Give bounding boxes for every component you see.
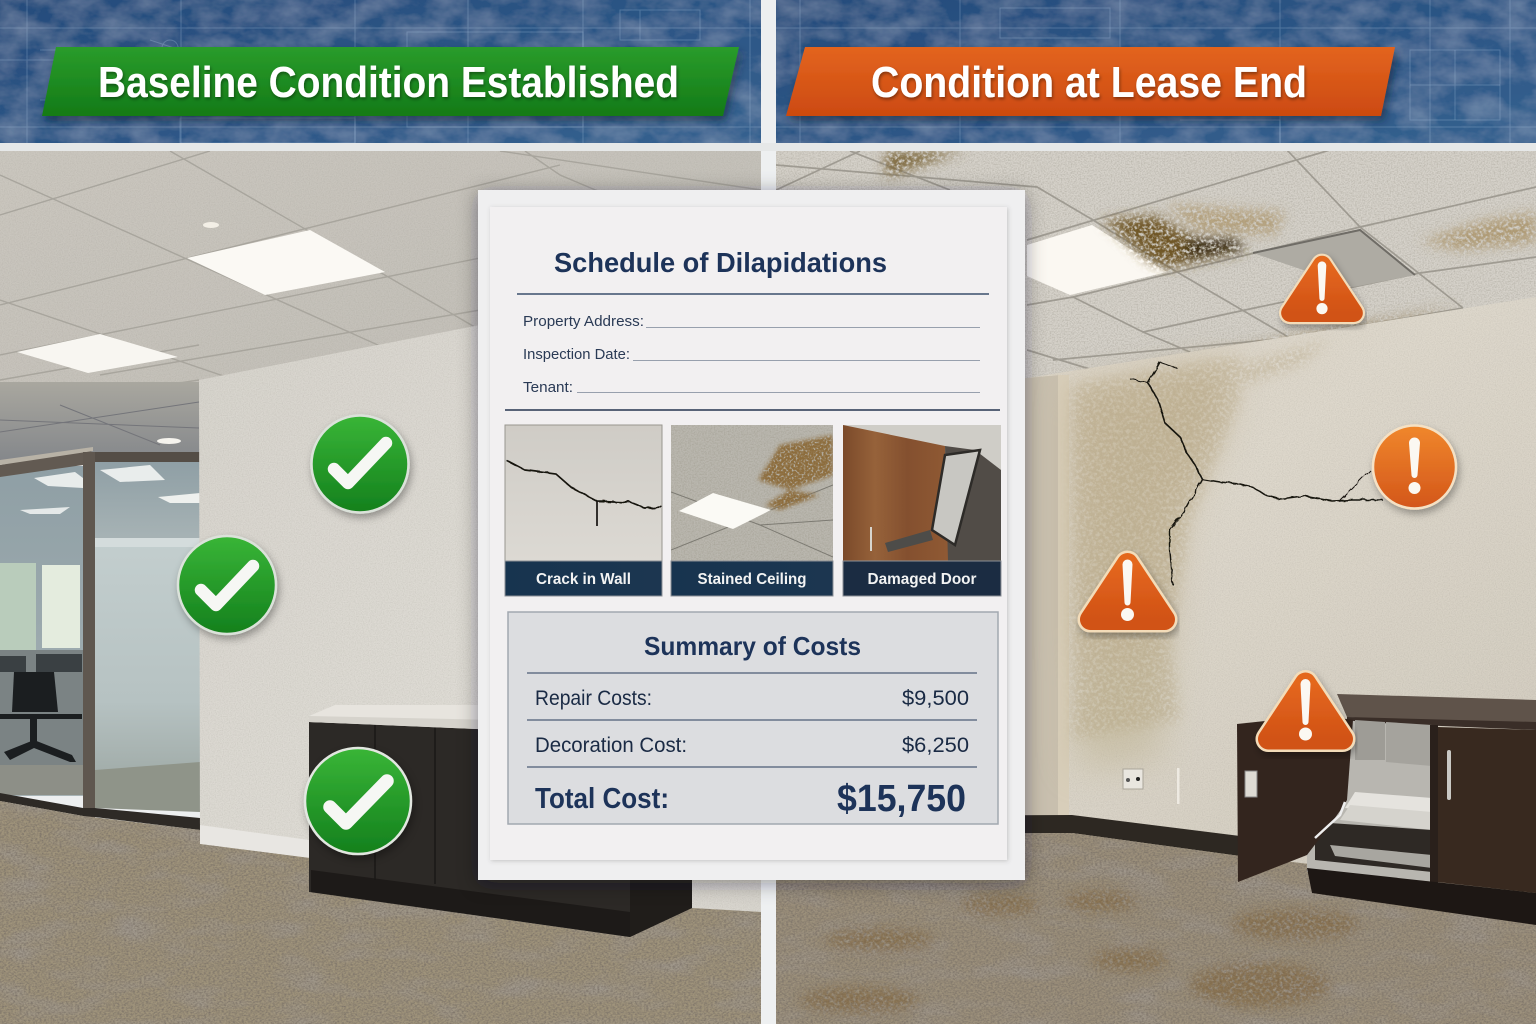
back paper sheet [478,190,1025,880]
panel: right blueprint header [776,0,1536,143]
photo: crack in wall: Crack in Wall [536,571,631,588]
repair costs row: $9,500 [902,687,969,710]
repair costs row [535,687,969,710]
total cost row: $15,750 [837,778,966,820]
photo: damaged door: Damaged Door [868,571,976,588]
divider: horizontal gutter [0,143,1536,151]
frames [0,449,93,477]
panel: left blueprint header [0,0,761,143]
banner: baseline condition [42,47,739,116]
form fields [523,313,980,396]
total cost row: Total Cost: [535,783,669,815]
total cost row [535,778,966,820]
panel: right office scene, condition at lease end [776,150,1536,1024]
decoration cost row: $6,250 [902,734,969,757]
outlet and fitting [1123,768,1180,804]
damaged ceiling [776,150,1536,391]
photo: crack in wall [505,425,662,596]
summary heading: Summary of Costs [644,631,861,661]
ceiling water stains [885,151,1536,372]
banner heading right: Condition at Lease End [871,58,1307,107]
photo: stained ceiling [671,425,833,596]
icon: warning triangle ceiling [1290,261,1354,314]
damaged wall [1025,297,1536,864]
left ceiling [0,151,761,382]
repair costs row: Repair Costs: [535,687,652,710]
form fields: Tenant: [523,379,573,396]
icon: warning triangle wall [1090,560,1164,621]
conference room behind glass [0,382,200,830]
photo: damaged door [843,425,1001,596]
photo: stained ceiling: Stained Ceiling [698,571,806,588]
panel: summary of costs [508,612,998,824]
stained carpet floor [776,833,1536,1024]
form fields: Inspection Date: [523,346,630,363]
document title: Schedule of Dilapidations [554,247,887,278]
left carpet floor [0,801,761,1024]
banner heading left: Baseline Condition Established [98,58,679,107]
wall crack network [1130,362,1383,585]
worn skirting board [1025,815,1238,856]
wall damp patches [1072,360,1230,770]
icon: green check 1 [312,416,408,512]
right frosted glass panel [95,462,200,540]
form fields: Property Address: [523,313,644,330]
icon: green check 3 [305,748,411,854]
damaged cabinet [1237,694,1536,925]
decoration cost row [535,734,969,757]
left wall [199,326,761,912]
icon: green check 2 [178,536,276,634]
banner: lease end condition [786,47,1395,116]
icon: warning triangle cabinet [1268,679,1342,740]
document: schedule of dilapidations [478,190,1025,880]
panel: left office scene, baseline condition [0,151,761,1024]
left cabinet [309,705,692,937]
front paper sheet [490,207,1007,860]
divider: vertical gutter [761,143,776,1024]
icon: warning circle crack [1373,426,1456,508]
left glass panel [0,466,83,796]
decoration cost row: Decoration Cost: [535,734,687,757]
